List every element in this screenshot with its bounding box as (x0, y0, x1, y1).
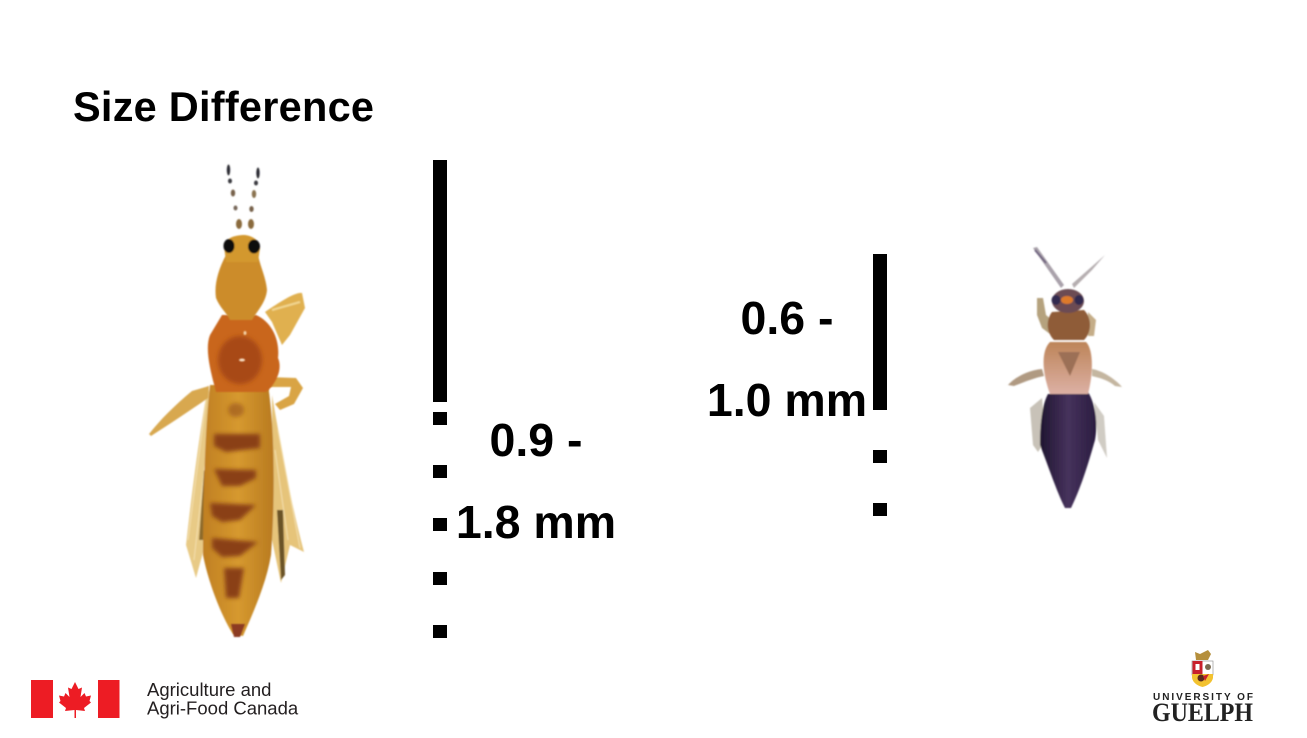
University of Guelph logo: GUELPH (1152, 698, 1253, 727)
department name: Agri-Food Canada (147, 698, 299, 718)
crest (1192, 650, 1213, 687)
large size label: 0.9 - (489, 414, 583, 466)
large scale bar (433, 160, 447, 638)
Agriculture Canada logo (31, 679, 299, 718)
large size label: 1.8 mm (456, 496, 616, 548)
large size label (456, 414, 616, 548)
abdomen bands (210, 403, 260, 598)
University of Guelph logo (1152, 650, 1253, 727)
small thrips photo (1008, 247, 1122, 508)
small size label: 1.0 mm (707, 374, 867, 426)
department name (147, 679, 299, 718)
small size label (707, 292, 867, 426)
small scale bar (873, 254, 887, 516)
university wordmark: UNIVERSITY OF (1153, 692, 1253, 703)
title: Size Difference (73, 83, 374, 130)
Canadian flag (31, 680, 120, 718)
large thrips photo (149, 164, 305, 637)
department name: Agriculture and (147, 679, 271, 700)
small size label: 0.6 - (740, 292, 834, 344)
